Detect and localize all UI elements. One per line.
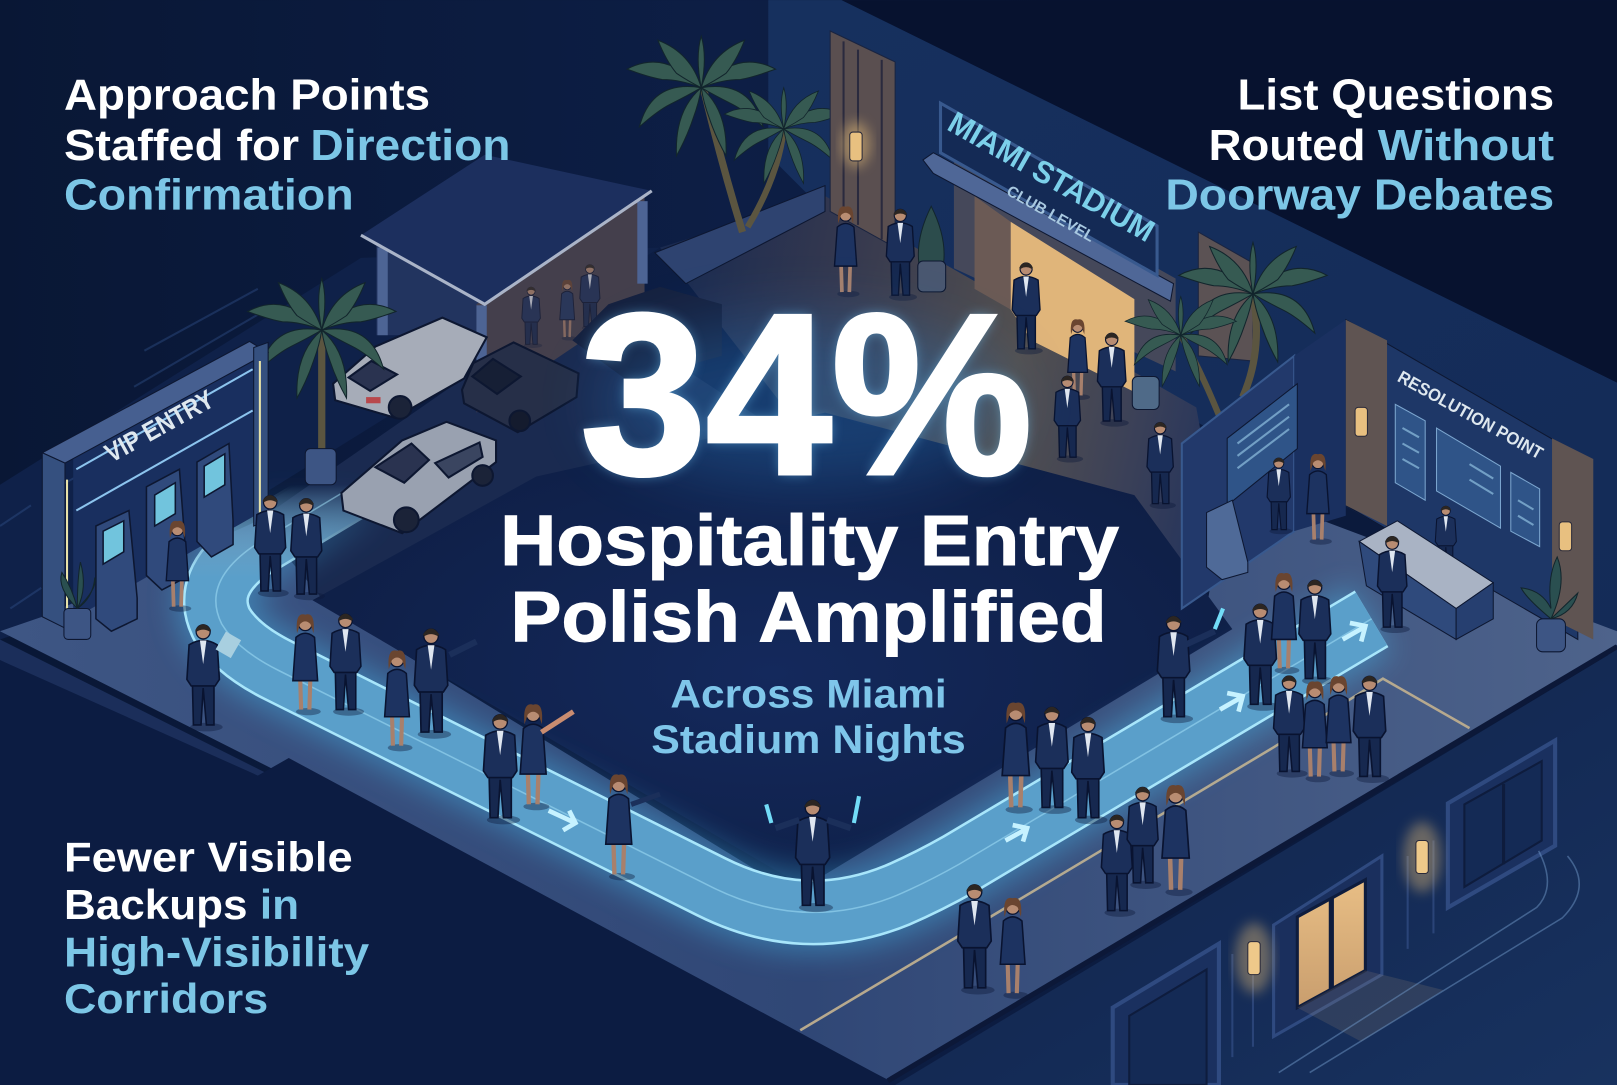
vip entry gate xyxy=(42,341,268,631)
guests and staff xyxy=(166,206,1410,999)
callout: top right: Without xyxy=(1378,122,1554,170)
wall pilasters xyxy=(1232,841,1433,1057)
receptionist xyxy=(1435,506,1458,575)
lower wall with doors xyxy=(888,647,1617,1085)
driveway xyxy=(258,299,815,608)
kiosks xyxy=(96,444,233,631)
sub-heading: Across Miami xyxy=(670,672,947,717)
headline label xyxy=(500,502,1119,658)
callout: bottom left: Backups xyxy=(64,882,248,928)
sub-heading: Stadium Nights xyxy=(651,717,966,762)
centre glow behind headline xyxy=(600,320,1013,485)
door: right xyxy=(1448,740,1555,908)
headline label: Polish Amplified xyxy=(510,579,1107,658)
potted plant left xyxy=(61,562,95,639)
warm lit floor xyxy=(660,196,1227,608)
walkway floor xyxy=(0,485,1617,1080)
palm trees left and center xyxy=(248,36,843,485)
sign: miami stadium: MIAMI STADIUM xyxy=(942,105,1160,249)
callout: top right: Doorway Debates xyxy=(1165,171,1554,219)
lower-left void xyxy=(0,660,897,1085)
callout: bottom left: High-Visibility xyxy=(64,929,369,975)
dark suv xyxy=(462,342,579,432)
callout: top left: Confirmation xyxy=(64,171,354,219)
silver car back xyxy=(333,318,487,419)
door: lit entrance xyxy=(1274,856,1444,1042)
door: lower xyxy=(1113,944,1219,1085)
palms right xyxy=(918,206,1327,423)
wall sconces xyxy=(1235,822,1441,993)
callout: bottom left: Corridors xyxy=(64,976,268,1022)
cars xyxy=(333,287,722,533)
resolution point area xyxy=(1182,320,1593,652)
callout: bottom left: in xyxy=(260,882,299,928)
silver car front xyxy=(341,422,496,533)
glowing guide path xyxy=(216,485,1372,912)
callout: top left: Approach Points xyxy=(64,71,430,119)
vip entry sign text: VIP ENTRY xyxy=(100,384,219,468)
sign: miami stadium: CLUB LEVEL xyxy=(1003,183,1097,246)
sign: miami stadium xyxy=(923,103,1174,301)
sub-heading xyxy=(651,672,966,762)
amber floor lines xyxy=(800,679,1470,1030)
central dark plaza xyxy=(312,413,1232,887)
headline stat: 34%: 34% xyxy=(581,266,1032,522)
resolution point sign text: RESOLUTION POINT xyxy=(1394,367,1547,463)
callout: top right xyxy=(1165,71,1554,219)
callout: bottom left: Fewer Visible xyxy=(64,834,353,880)
callout: top left xyxy=(64,71,510,219)
canopy with guests xyxy=(361,155,652,413)
headline label: Hospitality Entry xyxy=(500,502,1119,581)
stadium entrance xyxy=(830,31,1253,392)
callout: top left: Staffed for xyxy=(64,122,299,170)
callout: top left: Direction xyxy=(310,122,510,170)
callout: top right: Routed xyxy=(1209,122,1365,170)
dark car behind headline xyxy=(572,287,722,382)
stadium wall xyxy=(768,0,1617,660)
path arrows xyxy=(549,623,1365,842)
resolution kiosk xyxy=(1207,500,1248,580)
headline stat: 34%: 34% xyxy=(581,266,1032,522)
callout: bottom left xyxy=(64,834,369,1022)
upper-right night sky xyxy=(842,0,1617,383)
floor ledge xyxy=(0,639,888,1085)
callout: top right: List Questions xyxy=(1238,71,1554,119)
resolution desk xyxy=(1359,521,1493,639)
floor light trails xyxy=(1279,851,1579,1073)
upper-left back wall with faint data text xyxy=(0,248,660,639)
